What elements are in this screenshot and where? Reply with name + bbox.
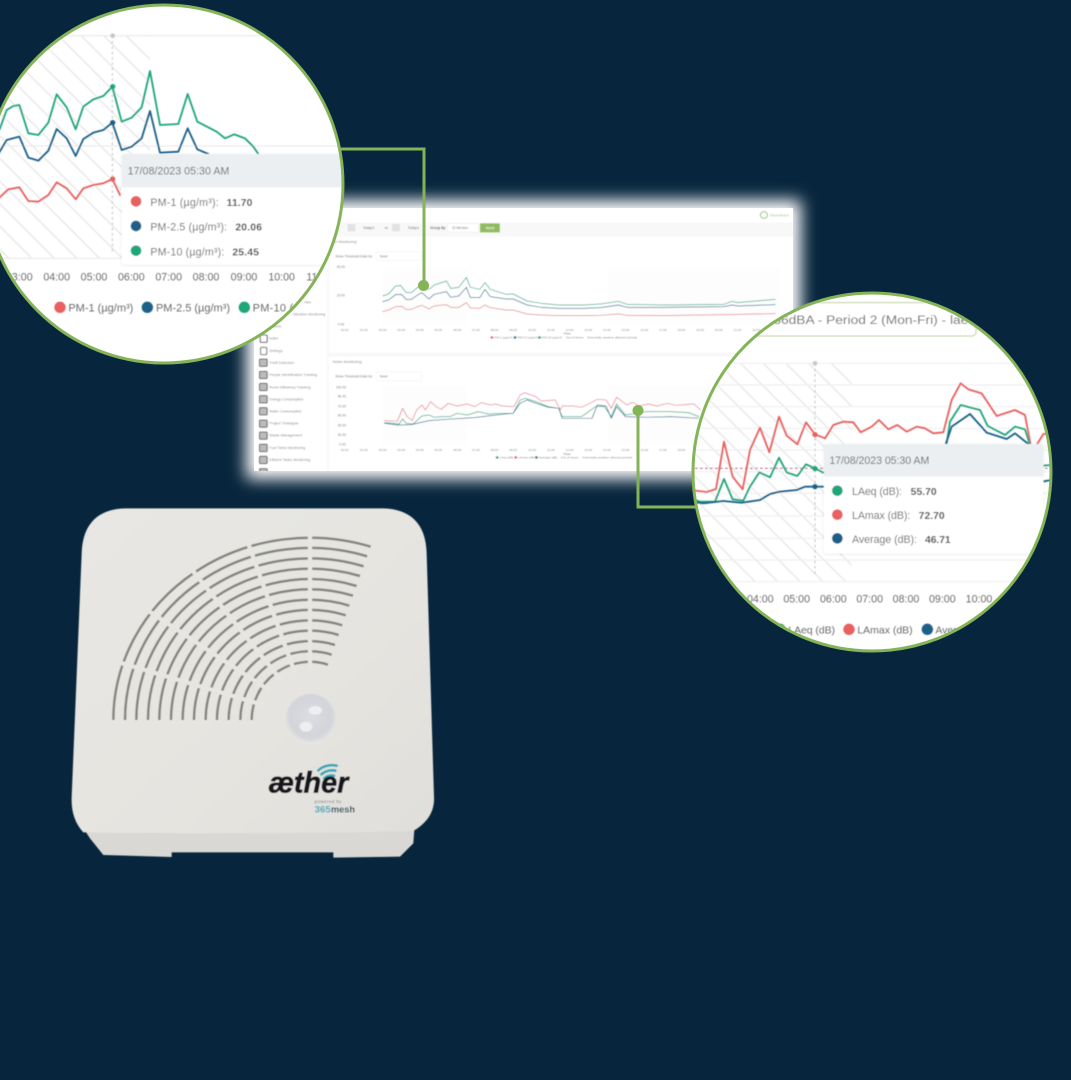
air tooltip: PM-10 (µg/m³): bbox=[150, 246, 224, 258]
callout: noise level zoom bbox=[683, 293, 1057, 651]
noise chart time axis: 07:00 bbox=[856, 594, 883, 606]
noise tooltip: 46.71 bbox=[925, 535, 951, 546]
panel: noise monitoring chart: 17:00 bbox=[659, 448, 667, 452]
noise tooltip bbox=[824, 444, 1043, 553]
sidebar menu: Room Efficiency Tracking bbox=[269, 385, 311, 389]
panel: noise monitoring chart: 07:00 bbox=[472, 448, 480, 452]
panel: air monitoring chart: 02:00 bbox=[379, 328, 387, 332]
air tooltip: 25.45 bbox=[232, 247, 259, 258]
panel: noise monitoring chart: Out of Hours bbox=[561, 456, 579, 460]
panel: noise monitoring chart: 100.00 bbox=[336, 385, 346, 389]
aether logo bbox=[268, 765, 355, 815]
aether logo: powered by bbox=[315, 799, 342, 804]
air chart time axis bbox=[10, 272, 316, 282]
noise tooltip: 55.70 bbox=[911, 487, 937, 498]
noise tooltip: 72.70 bbox=[919, 511, 945, 522]
panel: noise monitoring chart: 40.00 bbox=[338, 433, 346, 437]
noise chart legend: LAmax (dB) bbox=[857, 625, 913, 636]
panel: air monitoring chart: 04:00 bbox=[416, 328, 424, 332]
device face bbox=[72, 508, 434, 833]
toolbar: 15 Minutes bbox=[452, 226, 468, 230]
toolbar: Today's bbox=[363, 226, 375, 230]
sidebar menu: Energy Consumption bbox=[269, 397, 304, 401]
sidebar menu: Settings bbox=[269, 349, 283, 353]
panel: air monitoring chart: 0.00 bbox=[338, 322, 344, 326]
noise chart hatched out of hours bbox=[683, 363, 852, 582]
air chart time axis: 06:00 bbox=[118, 272, 145, 284]
speaker vent arcs bbox=[110, 528, 371, 720]
panel: air monitoring chart: 22:00 bbox=[752, 328, 760, 332]
air chart time axis: 03:00 bbox=[6, 272, 33, 284]
toolbar: to bbox=[385, 226, 388, 230]
sidebar menu: Waste Management bbox=[269, 434, 302, 438]
sidebar menu: Project Timelapse bbox=[269, 422, 298, 426]
panel: air monitoring chart: 21:00 bbox=[734, 328, 742, 332]
noise chart legend: LAeq (dB) bbox=[788, 625, 835, 636]
device side band bbox=[73, 795, 434, 858]
panel: air monitoring chart: 20:00 bbox=[715, 328, 723, 332]
noise tooltip: LAeq (dB): bbox=[852, 486, 902, 498]
panel: air monitoring chart: 17:00 bbox=[659, 328, 667, 332]
air tooltip: 20.06 bbox=[235, 223, 262, 234]
panel: noise monitoring chart: 18:00 bbox=[678, 448, 686, 452]
panel: air monitoring chart: PM-10 (µg/m³) bbox=[542, 336, 562, 340]
noise tooltip: LAmax (dB): bbox=[852, 510, 910, 522]
sidebar menu: Alerts bbox=[272, 325, 281, 329]
noise chart legend: Average (dB) bbox=[935, 625, 997, 636]
toolbar: Today's bbox=[408, 226, 419, 230]
panel: noise monitoring chart: Time bbox=[563, 452, 571, 456]
air chart hatched out of hours bbox=[0, 36, 150, 258]
air chart legend bbox=[54, 302, 327, 315]
panel: noise monitoring chart: None bbox=[380, 374, 388, 378]
panel: air monitoring chart: Potentially weather affected periods bbox=[587, 336, 638, 340]
noise chart time axis: 09:00 bbox=[929, 594, 956, 606]
panel: noise monitoring chart: 13:00 bbox=[584, 448, 592, 452]
panel: air monitoring chart: 08:00 bbox=[491, 328, 499, 332]
panel: air monitoring chart: 15:00 bbox=[621, 328, 630, 332]
panel: noise monitoring chart: 70.00 bbox=[338, 404, 346, 408]
screenshot glow bbox=[246, 200, 801, 479]
air chart time axis: 04:00 bbox=[43, 272, 70, 284]
panel: air monitoring chart: PM-1 (µg/m³) bbox=[494, 336, 513, 340]
sidebar menu: Effluent Tanks Monitoring bbox=[269, 458, 310, 462]
panel: air monitoring chart bbox=[334, 240, 776, 340]
panel: air monitoring chart: 16:00 bbox=[640, 328, 649, 332]
air chart legend: PM-2.5 (µg/m³) bbox=[156, 303, 230, 315]
aether logo: æther bbox=[268, 767, 350, 800]
panel: noise monitoring chart: Show Threshold Data for: bbox=[335, 374, 373, 378]
sidebar menu: Fuel Tanks Monitoring bbox=[269, 446, 305, 450]
panel: air monitoring chart: 01:00 bbox=[360, 328, 368, 332]
panel: air monitoring chart: 05:00 bbox=[434, 328, 443, 332]
noise chart time axis bbox=[746, 594, 992, 604]
panel: air monitoring chart: 06:00 bbox=[453, 328, 462, 332]
air chart legend: PM-10 (µg/m³) bbox=[253, 303, 327, 315]
noise chart time axis: 06:00 bbox=[820, 594, 847, 606]
threshold selector box bbox=[730, 303, 976, 336]
noise chart time axis: 10:00 bbox=[966, 594, 992, 606]
panel: noise monitoring chart: 08:00 bbox=[491, 448, 499, 452]
panel: noise monitoring chart: 14:00 bbox=[603, 448, 611, 452]
panel: air monitoring chart: 30.00 bbox=[337, 265, 345, 269]
aether logo: mesh bbox=[331, 805, 355, 815]
noise chart lines bbox=[690, 383, 1052, 503]
air tooltip: 11.70 bbox=[227, 198, 253, 209]
connector arrow: noise chart callout bbox=[632, 405, 700, 507]
panel: noise monitoring chart: 10:00 bbox=[528, 448, 536, 452]
panel: noise monitoring chart: 16:00 bbox=[640, 448, 649, 452]
panel: air monitoring chart: PM-2.5 (µg/m³) bbox=[517, 336, 538, 340]
panel: air monitoring chart: 03:00 bbox=[397, 328, 405, 332]
panel: noise monitoring chart: Potentially weather affected periods bbox=[583, 456, 633, 460]
toolbar: Group By bbox=[430, 226, 446, 230]
air tooltip: PM-2.5 (µg/m³): bbox=[150, 222, 227, 234]
air tooltip: 17/08/2023 05:30 AM bbox=[128, 165, 229, 177]
panel: noise monitoring chart bbox=[332, 360, 701, 460]
air chart time axis: 07:00 bbox=[155, 272, 182, 284]
panel: noise monitoring chart: 03:00 bbox=[397, 448, 405, 452]
sidebar menu: Water Consumption bbox=[269, 410, 302, 414]
panel: noise monitoring chart: 09:00 bbox=[509, 448, 517, 452]
air chart time axis: 08:00 bbox=[193, 272, 219, 284]
air chart lines bbox=[0, 71, 258, 202]
sidebar menu: Vibration Monitoring bbox=[293, 312, 325, 316]
callout: PM air quality zoom bbox=[0, 5, 375, 363]
air chart time axis: 09:00 bbox=[231, 272, 257, 284]
panel: air monitoring chart: 15.00 bbox=[337, 293, 345, 297]
panel: noise monitoring chart: 02:00 bbox=[379, 448, 387, 452]
panel: air monitoring chart: 10:00 bbox=[528, 328, 536, 332]
panel: noise monitoring chart: 05:00 bbox=[434, 448, 443, 452]
panel: air monitoring chart: 19:00 bbox=[696, 328, 704, 332]
panel: noise monitoring chart: 60.00 bbox=[338, 414, 346, 418]
top bar bbox=[480, 210, 789, 224]
panel: air monitoring chart: Show Threshold Data for: bbox=[335, 254, 373, 258]
panel: air monitoring chart: Out of Hours bbox=[566, 336, 584, 340]
panel: noise monitoring chart: 06:00 bbox=[453, 448, 462, 452]
noise chart time axis: 04:00 bbox=[747, 594, 774, 606]
panel: noise monitoring chart: LAmax (dB) bbox=[518, 456, 535, 460]
panel: air monitoring chart: Air Monitoring bbox=[333, 240, 357, 244]
panel: air monitoring chart: 14:00 bbox=[603, 328, 611, 332]
panel: noise monitoring chart: 00:00 bbox=[341, 448, 349, 452]
connector arrow: air chart callout bbox=[340, 149, 429, 291]
panel: noise monitoring chart: Noise Monitoring bbox=[333, 360, 362, 364]
panel: noise monitoring chart: 01:00 bbox=[360, 448, 368, 452]
panel: noise monitoring chart: 15:00 bbox=[621, 448, 630, 452]
toolbar bbox=[348, 223, 500, 232]
panel: air monitoring chart: 11:00 bbox=[547, 328, 555, 332]
air chart time axis: 10:00 bbox=[268, 272, 295, 284]
panel: air monitoring chart: 18:00 bbox=[678, 328, 686, 332]
panel: noise monitoring chart: 11:00 bbox=[547, 448, 555, 452]
panel: noise monitoring chart: 12:00 bbox=[566, 448, 574, 452]
panel: air monitoring chart: 12:00 bbox=[566, 328, 574, 332]
sidebar menu: Hire bbox=[304, 300, 311, 304]
air chart legend: PM-1 (µg/m³) bbox=[68, 303, 133, 315]
top bar: Newsfeed bbox=[770, 213, 789, 218]
noise tooltip: Average (dB): bbox=[852, 534, 917, 546]
sidebar menu bbox=[254, 223, 327, 476]
air tooltip bbox=[121, 153, 342, 266]
sidebar menu: People Identification Tracking bbox=[269, 373, 317, 377]
noise chart legend bbox=[778, 622, 957, 636]
sidebar menu: Theft Detection bbox=[269, 361, 294, 365]
sensor device bbox=[72, 508, 434, 858]
panel: air monitoring chart: 00:00 bbox=[341, 328, 349, 332]
panel: air monitoring chart: None bbox=[380, 254, 388, 258]
panel: air monitoring chart: 09:00 bbox=[509, 328, 517, 332]
toolbar: Apply bbox=[486, 226, 495, 230]
panel: noise monitoring chart: LAeq (dB) bbox=[499, 456, 514, 460]
panel: noise monitoring chart: 80.00 bbox=[338, 395, 346, 399]
air tooltip: PM-1 (µg/m³): bbox=[150, 197, 219, 209]
panel: noise monitoring chart: Average (dB) bbox=[539, 456, 557, 460]
motion sensor dome bbox=[285, 694, 336, 744]
panel: dashboard screenshot bbox=[254, 208, 794, 476]
noise tooltip: 17/08/2023 05:30 AM bbox=[829, 455, 929, 467]
threshold selector box: 66dBA - Period 2 (Mon-Fri) - lae bbox=[773, 313, 968, 327]
air chart time axis: 11:00 bbox=[306, 272, 332, 284]
noise chart time axis: 05:00 bbox=[783, 594, 810, 606]
sidebar menu: Index bbox=[269, 337, 278, 341]
noise chart time axis: 08:00 bbox=[893, 594, 919, 606]
air chart time axis: 05:00 bbox=[81, 272, 107, 284]
panel: noise monitoring chart: 0.00 bbox=[339, 442, 346, 446]
panel: air monitoring chart: 13:00 bbox=[584, 328, 592, 332]
panel: noise monitoring chart: 04:00 bbox=[416, 448, 424, 452]
panel: noise monitoring chart: 50.00 bbox=[338, 423, 346, 427]
panel: air monitoring chart: 07:00 bbox=[472, 328, 480, 332]
aether logo: 365 bbox=[315, 805, 331, 815]
panel: air monitoring chart: Time bbox=[563, 332, 571, 336]
